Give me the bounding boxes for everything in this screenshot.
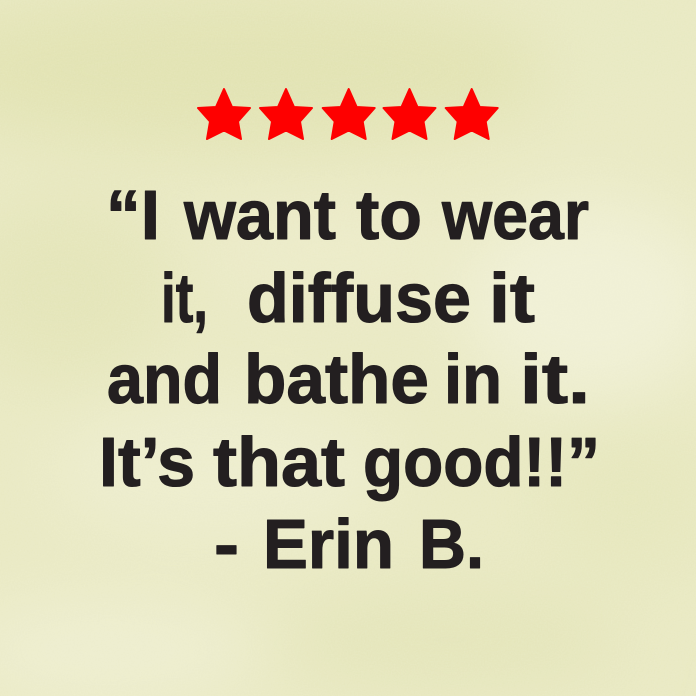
attribution: - bbox=[214, 505, 239, 583]
icon: star 3 bbox=[323, 89, 375, 139]
quote line 2: it bbox=[489, 259, 535, 337]
quote line 1 bbox=[106, 176, 589, 254]
icon: star 1 bbox=[198, 89, 250, 139]
icon: star 5 bbox=[446, 89, 498, 139]
quote line 4: that bbox=[213, 423, 345, 501]
quote line 3: in bbox=[444, 340, 502, 418]
quote line 2: diffuse bbox=[247, 259, 471, 337]
quote line 1: wear bbox=[441, 176, 589, 254]
icon: star 2 bbox=[260, 89, 312, 139]
quote line 3: it. bbox=[520, 340, 590, 418]
attribution bbox=[214, 505, 484, 583]
quote line 1: to bbox=[356, 176, 422, 254]
quote line 1: “I bbox=[106, 176, 160, 254]
quote line 4: It’s bbox=[99, 423, 195, 501]
quote line 1: want bbox=[183, 176, 336, 254]
attribution: Erin bbox=[263, 505, 394, 583]
quote line 4: good!!” bbox=[363, 423, 600, 501]
quote line 2 bbox=[161, 259, 535, 337]
attribution: B. bbox=[419, 505, 484, 583]
quote line 3: bathe bbox=[244, 340, 429, 418]
icon: star 4 bbox=[384, 89, 436, 139]
quote line 2: it, bbox=[161, 259, 208, 337]
quote line 3: and bbox=[107, 340, 222, 418]
quote line 3 bbox=[107, 340, 590, 418]
quote line 4 bbox=[99, 423, 600, 501]
